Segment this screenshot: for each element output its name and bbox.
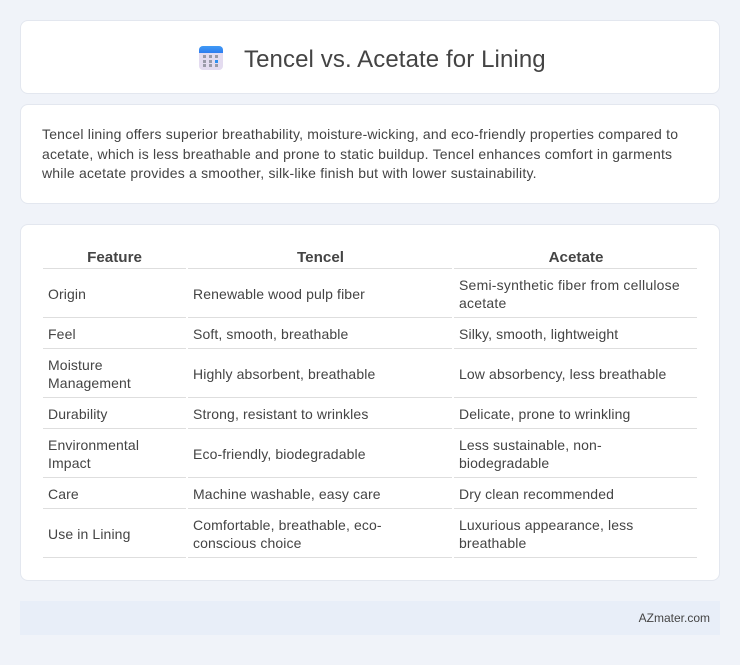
row: feel [48, 326, 618, 342]
row: environmental impact: Less sustainable, non- [459, 437, 602, 453]
row: care: Care [48, 486, 79, 502]
row: origin: Semi-synthetic fiber from cellulose [459, 277, 680, 293]
icon: calendar [199, 46, 223, 70]
row: use in lining: breathable [459, 535, 526, 551]
table header: Acetate [549, 249, 603, 266]
description text: acetate, which is less breathable and prone to static buildup. Tencel enhances comfort in garments [42, 146, 672, 162]
row: use in lining [48, 517, 633, 551]
row: care: Machine washable, easy care [193, 486, 381, 502]
row: feel: Soft, smooth, breathable [193, 326, 348, 342]
row: care: Dry clean recommended [459, 486, 614, 502]
description text: Tencel lining offers superior breathability, moisture-wicking, and eco-friendly properties compared to [42, 126, 678, 142]
table header [87, 249, 603, 266]
table header: Tencel [297, 249, 344, 266]
row: use in lining: Luxurious appearance, less [459, 517, 633, 533]
panel: comparison table [20, 224, 720, 581]
row: durability: Durability [48, 406, 108, 422]
row: environmental impact: Environmental [48, 437, 139, 453]
row: durability [48, 406, 630, 422]
panel: description [20, 104, 720, 204]
footer bar [20, 601, 720, 635]
row: use in lining: Use in Lining [48, 526, 130, 542]
row: moisture management [48, 357, 666, 391]
row: moisture management: Moisture [48, 357, 103, 373]
row: environmental impact [48, 437, 602, 471]
description text [42, 126, 678, 181]
row: origin: acetate [459, 295, 506, 311]
row: feel: Feel [48, 326, 76, 342]
row: origin: Renewable wood pulp fiber [193, 286, 365, 302]
title: Tencel vs. Acetate for Lining [244, 46, 546, 73]
row: environmental impact: biodegradable [459, 455, 549, 471]
row: durability: Strong, resistant to wrinkles [193, 406, 368, 422]
footer brand text: AZmater.com [639, 611, 710, 625]
row: moisture management: Management [48, 375, 131, 391]
row: durability: Delicate, prone to wrinkling [459, 406, 630, 422]
row: environmental impact: Eco-friendly, biodegradable [193, 446, 366, 462]
row: origin [48, 277, 680, 311]
row: use in lining: Comfortable, breathable, eco- [193, 517, 382, 533]
row: feel: Silky, smooth, lightweight [459, 326, 618, 342]
table header: Feature [87, 249, 142, 266]
row: use in lining: conscious choice [193, 535, 302, 551]
row: moisture management: Highly absorbent, breathable [193, 366, 375, 382]
row: origin: Origin [48, 286, 86, 302]
description text: while acetate provides a smoother, silk-like finish but with lower sustainability. [42, 165, 537, 181]
panel: header [20, 20, 720, 94]
row: moisture management: Low absorbency, less breathable [459, 366, 666, 382]
row: environmental impact: Impact [48, 455, 91, 471]
row: care [48, 486, 614, 502]
